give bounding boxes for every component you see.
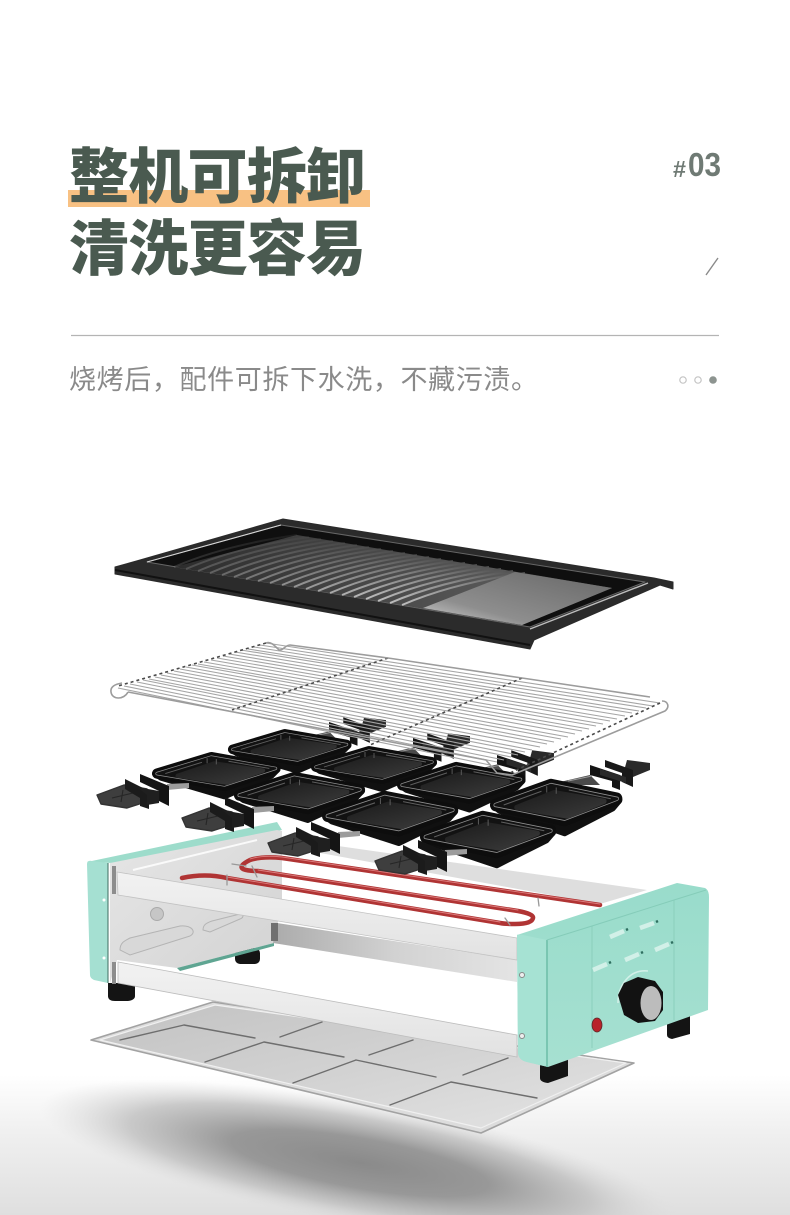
plate flat section	[423, 572, 612, 625]
rear rail	[273, 923, 517, 982]
rack wires	[118, 643, 660, 765]
left side panel	[87, 822, 282, 983]
lower front bar	[118, 962, 517, 1057]
base appliance	[87, 822, 709, 1083]
wire rack	[111, 643, 668, 775]
plate floor	[174, 535, 612, 625]
title	[68, 144, 370, 283]
background floor shadow	[0, 1075, 790, 1215]
control knob	[618, 977, 663, 1023]
vent slots	[593, 923, 669, 970]
rear pan handles under the rack	[300, 717, 650, 790]
pan handles front	[97, 774, 467, 875]
plate ridges	[174, 535, 525, 605]
section number: #	[673, 156, 686, 182]
subtitle: 烧烤后，配件可拆下水洗，不藏污渍。	[69, 365, 538, 395]
plate well	[147, 525, 645, 627]
title line 1: 整机可拆卸	[69, 144, 366, 211]
plate outer body	[115, 519, 673, 649]
divider line	[71, 334, 719, 336]
rack frame	[111, 643, 668, 775]
tray grooves	[120, 1022, 537, 1105]
pagination dots	[680, 376, 717, 384]
section number: 03	[688, 146, 721, 183]
left front foot	[108, 983, 135, 1001]
slash mark	[706, 258, 718, 275]
title highlight bar	[68, 190, 370, 207]
tray inner	[100, 1005, 626, 1128]
rack cross bars	[118, 643, 660, 773]
mini pans	[155, 734, 619, 864]
upper front bar	[117, 872, 517, 960]
grill plate	[115, 519, 673, 649]
right front foot	[540, 1052, 568, 1083]
tray outer	[91, 1002, 634, 1133]
indicator light	[592, 1018, 602, 1032]
right rear foot	[667, 1008, 690, 1039]
rear left foot	[235, 948, 260, 964]
right control panel	[517, 883, 709, 1067]
dial ring	[618, 971, 648, 1003]
drip tray	[91, 1002, 634, 1133]
heating coil	[182, 856, 600, 925]
section number	[673, 146, 721, 183]
title line 2: 清洗更容易	[69, 216, 366, 283]
rear top band	[282, 838, 647, 904]
